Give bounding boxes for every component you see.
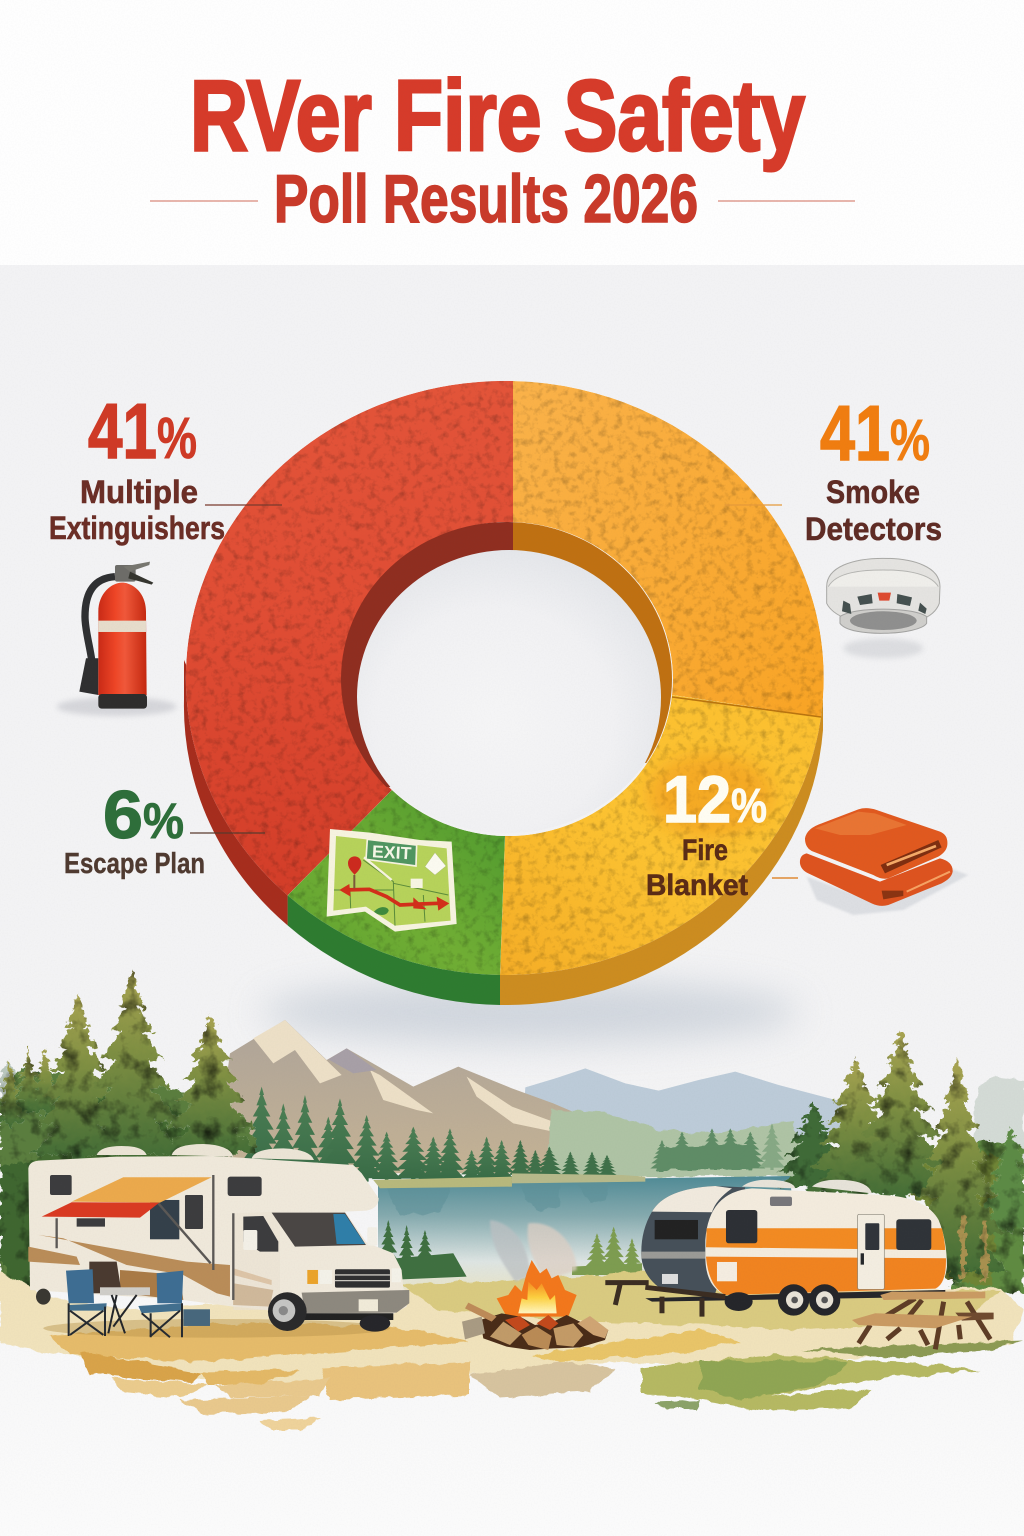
label: smoke detectors [725, 389, 942, 547]
awning [72, 1177, 212, 1203]
icon: smoke detector [827, 558, 940, 658]
snow capped mountains [213, 1020, 633, 1173]
title block [150, 60, 855, 237]
far treeline [242, 1087, 515, 1188]
label: multiple extinguishers: % [157, 406, 197, 471]
exit sign: EXIT [372, 841, 412, 863]
distant pale hills [545, 1077, 1024, 1177]
trailer main body [705, 1188, 947, 1295]
icon: exit map [327, 829, 457, 932]
label: multiple extinguishers: Extinguishers [49, 510, 225, 546]
segment: multiple extinguishers 41% [186, 381, 513, 895]
blanket upper fold [805, 808, 947, 879]
label: escape plan: % [143, 793, 184, 849]
trailer wheels [725, 1292, 753, 1311]
lake reflections [385, 1182, 610, 1215]
landscape scene [0, 968, 1024, 1430]
distant tree clump [650, 1123, 785, 1170]
lake [378, 1176, 800, 1290]
title: RVer Fire Safety [190, 60, 805, 172]
RV door and trim [57, 1175, 233, 1300]
subtitle: Poll Results 2026 [274, 161, 698, 237]
label: escape plan [64, 777, 265, 880]
donut drop shadow [260, 980, 800, 1044]
donut inner wall [335, 515, 678, 787]
trailer front section [641, 1186, 745, 1293]
small pines by lake [377, 1220, 644, 1280]
segment: smoke detectors 41% [513, 381, 824, 717]
label: fire blanket: Blanket [646, 869, 748, 902]
far treeline right [509, 1140, 645, 1183]
campfire [462, 1220, 608, 1350]
label: smoke detectors: Detectors [805, 511, 942, 547]
windshield [272, 1213, 366, 1247]
segment: fire blanket 12% [500, 695, 821, 975]
tree mass right [899, 1140, 1024, 1293]
logs [480, 1313, 608, 1350]
label: fire blanket: Fire [682, 834, 728, 867]
label: fire blanket: 12 [663, 762, 731, 836]
label: multiple extinguishers: 41 [88, 387, 157, 475]
camp chairs and table [66, 1262, 183, 1337]
label: multiple extinguishers [49, 387, 282, 546]
label: fire blanket [646, 762, 798, 902]
RV windows [50, 1175, 278, 1252]
motorhome RV [28, 1144, 409, 1338]
donut hole [357, 550, 661, 833]
picnic table [852, 1292, 994, 1349]
flames [497, 1260, 577, 1317]
donut top faces [186, 381, 824, 975]
label: smoke detectors: % [890, 408, 930, 473]
label: fire blanket: % [731, 780, 767, 833]
donut side walls [184, 660, 823, 1005]
tall pines left [0, 968, 259, 1165]
tall pines right [774, 1030, 1024, 1283]
ground washes [0, 1270, 1024, 1430]
segment: escape plan 6% [288, 790, 505, 975]
label: smoke detectors: 41 [820, 389, 890, 477]
blanket lower fold [800, 853, 953, 906]
grille and bumper [335, 1269, 390, 1288]
roof vents [97, 1144, 314, 1160]
far blue mountains [522, 1068, 845, 1140]
donut chart [184, 381, 824, 1005]
icon: folded blanket [800, 808, 968, 915]
RV wheels [268, 1292, 307, 1331]
trailer hitch and stands [605, 1283, 725, 1317]
label: multiple extinguishers: Multiple [80, 474, 198, 510]
smoke [490, 1220, 577, 1282]
label: smoke detectors: Smoke [826, 474, 920, 510]
RV body [28, 1156, 409, 1314]
icon: fire extinguisher [57, 562, 177, 716]
travel trailer [605, 1180, 994, 1349]
tree mass left [0, 1060, 257, 1297]
label: escape plan: 6 [103, 777, 143, 853]
label: escape plan: Escape Plan [64, 848, 205, 880]
